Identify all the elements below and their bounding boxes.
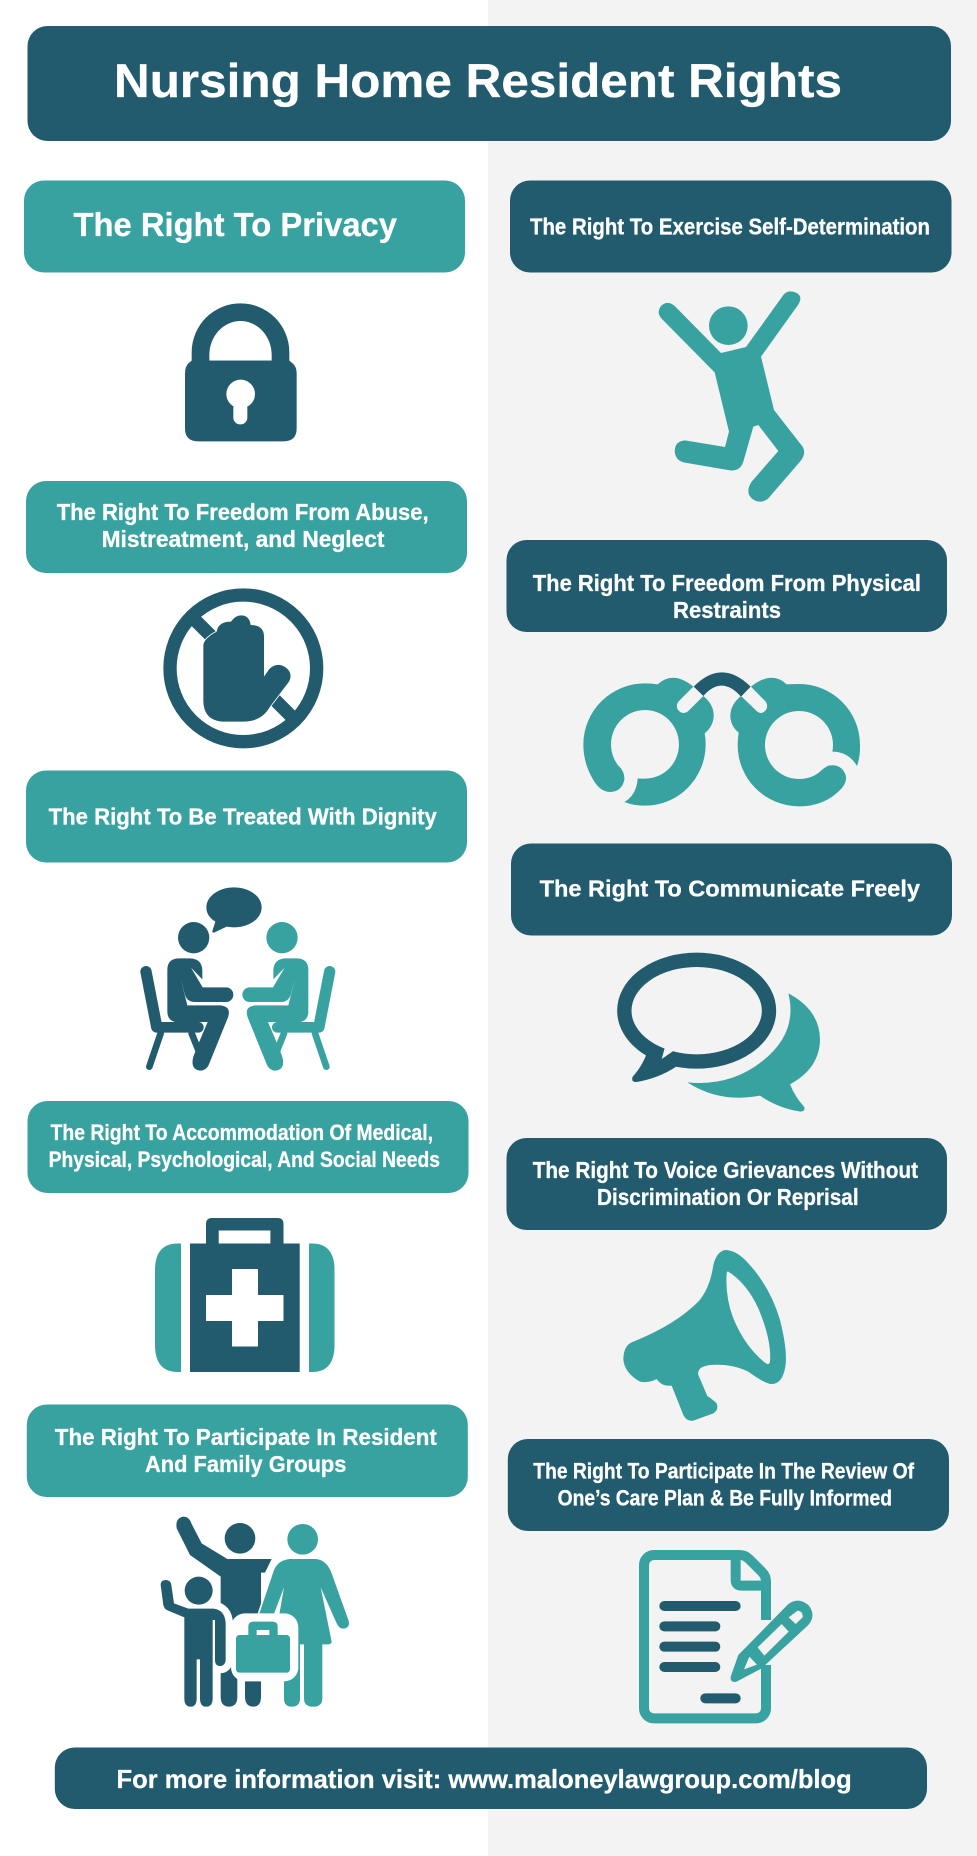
panel: right to self-determination [510, 180, 952, 272]
text: restraints line one: The Right To Freedom From Physical [533, 570, 921, 596]
left person [146, 922, 233, 1071]
text: grievances line two: Discrimination Or Reprisal [597, 1184, 859, 1210]
icon: speech bubbles [624, 960, 820, 1112]
text: abuse line one: The Right To Freedom From Abuse, [57, 499, 429, 525]
man [176, 1517, 272, 1707]
icon: jumping person [659, 291, 804, 502]
suitcase [231, 1613, 298, 1681]
woman [258, 1524, 349, 1707]
text: accommodation line two: Physical, Psychological, And Social Needs [49, 1147, 440, 1172]
footer panel [55, 1748, 927, 1809]
icon: handcuffs [583, 672, 860, 806]
text: grievances line one: The Right To Voice Grievances Without [533, 1157, 918, 1183]
icon: family with suitcase [161, 1517, 349, 1707]
text: groups line two: And Family Groups [145, 1451, 346, 1477]
text: restraints line two: Restraints [673, 597, 781, 623]
text: accommodation line one: The Right To Accommodation Of Medical, [50, 1120, 433, 1145]
panel: review of care plan [508, 1439, 949, 1531]
title panel [28, 26, 951, 141]
panel: accommodation of needs [28, 1101, 468, 1193]
right person [242, 922, 330, 1071]
heading: privacy: The Right To Privacy [74, 206, 398, 243]
icon: padlock [185, 303, 297, 441]
title heading: Nursing Home Resident Rights [114, 54, 842, 107]
panel: treated with dignity [26, 770, 467, 862]
heading: dignity: The Right To Be Treated With Dignity [49, 804, 437, 830]
heading: communicate: The Right To Communicate Freely [540, 876, 920, 902]
text: groups line one: The Right To Participate In Resident [55, 1424, 437, 1450]
icon: stop hand [170, 595, 317, 742]
panel: resident and family groups [27, 1404, 468, 1497]
footer link text: For more information visit: www.maloneylawgroup.com/blog [116, 1764, 852, 1794]
icon: medical kit [155, 1218, 334, 1372]
heading: self-determination: The Right To Exercise Self-Determination [530, 214, 930, 240]
panel: right to privacy [24, 180, 465, 272]
panel: communicate freely [511, 844, 952, 936]
speech bubble [206, 887, 262, 933]
panel: voice grievances [506, 1138, 947, 1230]
panel: freedom from abuse [26, 481, 467, 573]
icon: megaphone [623, 1250, 786, 1421]
boy [161, 1577, 226, 1707]
text: care plan line two: One’s Care Plan & Be Fully Informed [558, 1485, 892, 1510]
icon: document and pen [644, 1555, 812, 1718]
panel: freedom from physical restraints [506, 540, 947, 632]
text: abuse line two: Mistreatment, and Neglect [102, 526, 385, 552]
text: care plan line one: The Right To Participate In The Review Of [533, 1459, 915, 1484]
icon: two seated people talking [146, 887, 330, 1071]
